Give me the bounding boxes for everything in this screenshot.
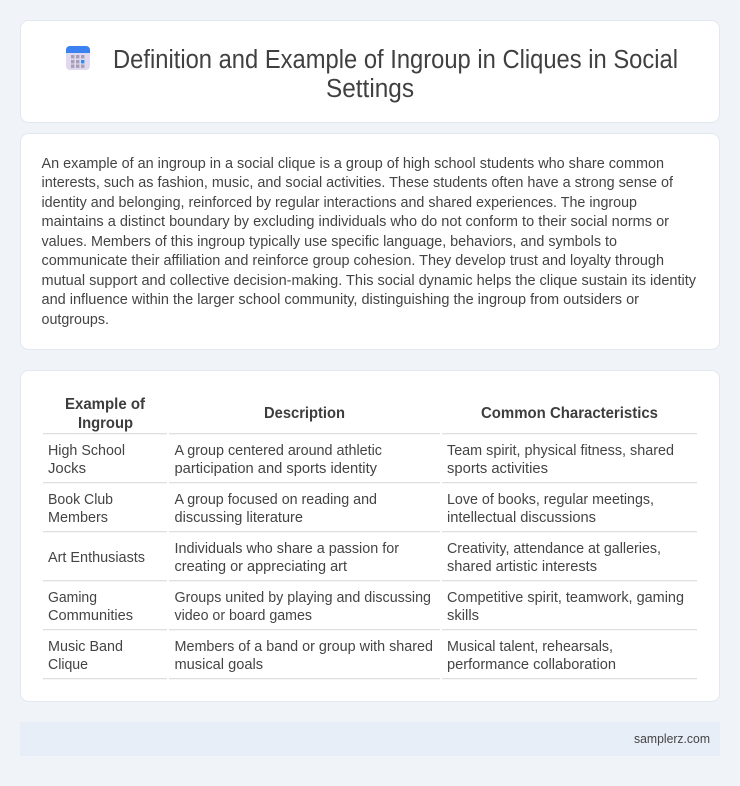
table row: art enthusiasts: Creativity, attendance at galleries,	[447, 541, 661, 557]
table row: gaming communities: Gaming	[48, 590, 97, 606]
table row: book club members: A group focused on reading and	[174, 492, 377, 508]
table row: book club members: Book Club	[48, 492, 113, 508]
table row: high school jocks: participation and sports identity	[174, 461, 378, 477]
footer: samplerz.com	[634, 732, 710, 746]
title: Settings	[326, 75, 414, 103]
panel: title header	[20, 20, 720, 122]
table row: book club members: Members	[48, 510, 108, 526]
table row: gaming communities: Competitive spirit, teamwork, gaming	[447, 590, 684, 606]
text block: paragraph: values. Members of this ingroup typically use specific language, behaviors, and symbols to	[42, 234, 617, 250]
table row: gaming communities: skills	[447, 608, 479, 624]
title	[113, 46, 678, 103]
table row: music band clique: musical goals	[174, 657, 263, 673]
table row: art enthusiasts: creating or appreciating art	[174, 559, 347, 575]
title: Definition and Example of Ingroup in Cliques in Social	[113, 46, 678, 74]
table row: music band clique: Music Band	[48, 639, 123, 655]
table row: high school jocks: sports activities	[447, 461, 548, 477]
table row: gaming communities: Groups united by playing and discussing	[174, 590, 431, 606]
table row: art enthusiasts: shared artistic interests	[447, 559, 597, 575]
table row: book club members: discussing literature	[174, 510, 303, 526]
table row: book club members: Love of books, regular meetings,	[447, 492, 654, 508]
text block: paragraph	[42, 156, 697, 328]
table row: book club members	[48, 492, 654, 526]
table row: high school jocks: Team spirit, physical fitness, shared	[447, 443, 674, 459]
panel: examples table	[20, 370, 720, 702]
table row: music band clique: performance collaboration	[447, 657, 616, 673]
icon: calendar	[66, 46, 90, 70]
table header row: Ingroup	[78, 415, 133, 432]
text block: paragraph: outgroups.	[42, 312, 109, 328]
table row: high school jocks: High School	[48, 443, 125, 459]
table row: high school jocks	[48, 443, 674, 477]
table row: art enthusiasts: Art Enthusiasts	[48, 550, 145, 566]
footer	[20, 722, 720, 756]
table row: gaming communities: video or board games	[174, 608, 312, 624]
table row: high school jocks: Jocks	[48, 461, 86, 477]
table row: high school jocks: A group centered around athletic	[174, 443, 382, 459]
panel: definition paragraph	[20, 134, 720, 350]
table header row	[65, 396, 658, 432]
text block: paragraph: maintains a distinct boundary by excluding individuals who do not conform to their social norms or	[42, 214, 669, 230]
text block: paragraph: mutual support and collective decision-making. This social dynamic helps the clique sustain its identity	[42, 273, 697, 289]
table row: music band clique: Musical talent, rehearsals,	[447, 639, 613, 655]
table row: book club members: intellectual discussions	[447, 510, 596, 526]
table header row: Description	[264, 405, 345, 422]
table row: music band clique: Members of a band or group with shared	[174, 639, 433, 655]
table row: art enthusiasts	[48, 541, 661, 575]
table row: music band clique: Clique	[48, 657, 88, 673]
text block: paragraph: communicate their affiliation and reinforce group cohesion. They develop trust and loyalty through	[42, 253, 664, 269]
table header row: Example of	[65, 396, 146, 413]
text block: paragraph: and influence within the larger school community, distinguishing the ingroup from outsiders or	[42, 292, 639, 308]
text block: paragraph: An example of an ingroup in a social clique is a group of high school students who share common	[42, 156, 664, 172]
table header row: Common Characteristics	[481, 405, 658, 422]
text block: paragraph: identity and belonging, reinforced by regular interactions and shared experiences. The ingroup	[42, 195, 637, 211]
table row: gaming communities	[48, 590, 684, 624]
table row: art enthusiasts: Individuals who share a passion for	[174, 541, 399, 557]
table row: gaming communities: Communities	[48, 608, 133, 624]
table row: music band clique	[48, 639, 616, 673]
text block: paragraph: interests, such as fashion, music, and social activities. These students often have a strong sense of	[42, 175, 674, 191]
